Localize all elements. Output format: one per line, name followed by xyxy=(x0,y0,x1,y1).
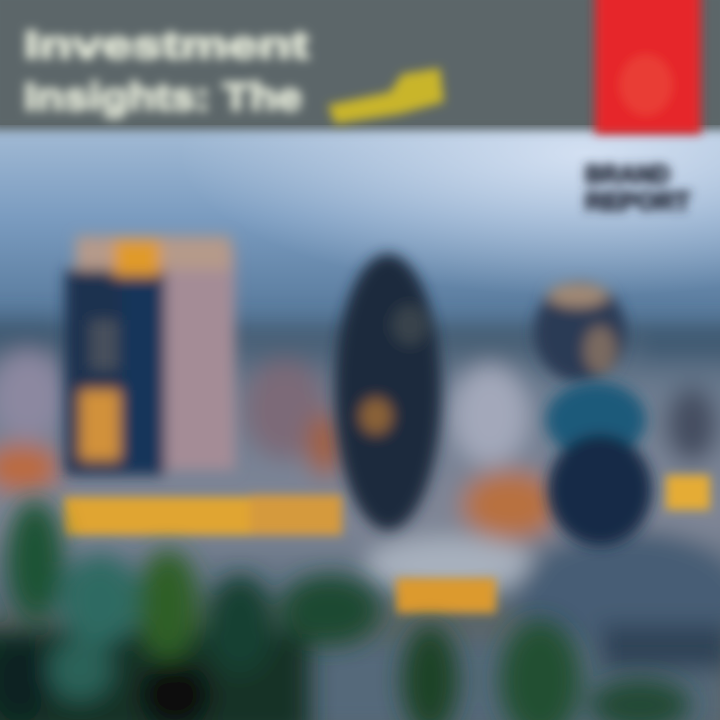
central oval tower xyxy=(335,254,441,530)
header band xyxy=(0,0,720,130)
orange bar centre xyxy=(396,578,496,613)
left tower xyxy=(65,236,235,475)
yellow tag right xyxy=(666,475,710,510)
headline text xyxy=(24,24,309,119)
right upper tower xyxy=(534,282,626,382)
dark logo text: REPORT xyxy=(585,188,690,216)
red badge xyxy=(595,0,701,134)
distant city skyline xyxy=(0,320,720,720)
foreground foliage xyxy=(0,500,690,720)
yellow highlight swoosh xyxy=(328,68,444,124)
sky background xyxy=(0,125,720,355)
dark logo text xyxy=(585,161,690,216)
headline text: Investment xyxy=(24,24,309,67)
yellow bar left xyxy=(64,495,342,535)
dark logo text: BRAND xyxy=(585,161,670,189)
right lower tower xyxy=(546,382,652,546)
headline text: Insights: The xyxy=(24,76,302,119)
